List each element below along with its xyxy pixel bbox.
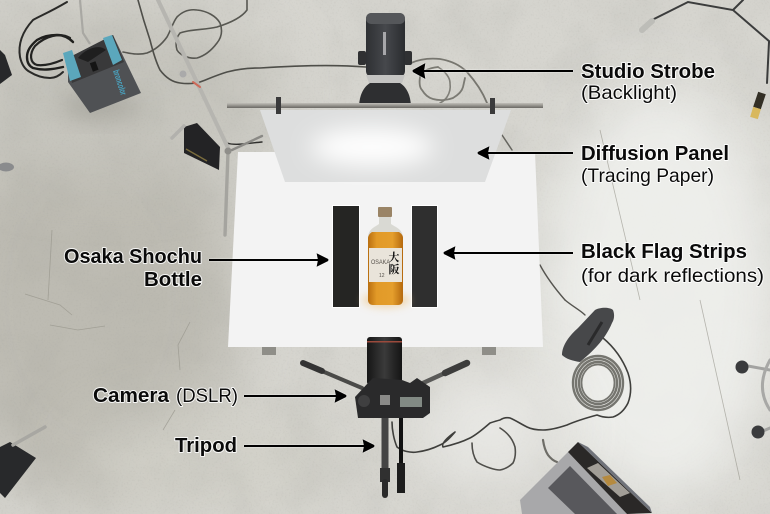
arrow: to tripod <box>244 441 374 451</box>
label: black flag strips: Black Flag Strips <box>581 241 747 263</box>
label: tripod: Tripod <box>175 435 237 457</box>
shochu bottle: OSAKA <box>371 260 390 266</box>
label: tripod <box>175 435 374 457</box>
label: diffusion panel <box>478 143 729 187</box>
label: camera: (DSLR) <box>176 385 238 407</box>
diffusion panel <box>260 110 511 182</box>
label: diffusion panel: (Tracing Paper) <box>581 165 714 187</box>
white table surface <box>228 152 543 355</box>
sandbag <box>172 123 220 170</box>
arrow: to black flag strips <box>444 248 573 258</box>
label: osaka shochu bottle: Osaka Shochu <box>64 246 202 268</box>
label: camera: Camera <box>93 385 170 407</box>
DSLR camera <box>355 337 430 418</box>
support rail with clamps <box>227 97 543 114</box>
label: diffusion panel: Diffusion Panel <box>581 143 729 165</box>
label: osaka shochu bottle: Bottle <box>144 269 202 291</box>
label: black flag strips: (for dark reflections) <box>581 265 764 287</box>
power pack: generator: broncolor <box>111 69 129 97</box>
black flag strips <box>332 205 438 308</box>
label: studio strobe: (Backlight) <box>581 82 677 104</box>
chair base right <box>736 360 770 438</box>
label: osaka shochu bottle <box>64 246 328 291</box>
cables on floor <box>20 0 631 470</box>
shochu bottle: 大 <box>388 249 400 265</box>
arrow: to bottle <box>209 255 328 265</box>
shochu bottle: 阪 <box>388 261 400 277</box>
studio strobe light <box>358 13 412 108</box>
laptop <box>520 442 652 514</box>
label: black flag strips <box>444 241 764 287</box>
sandbag right <box>562 308 614 362</box>
coiled cable <box>573 356 623 410</box>
light stand <box>158 0 262 235</box>
arrow: to camera <box>244 391 346 401</box>
arrow: to diffusion panel <box>478 148 573 158</box>
label: camera <box>93 385 346 407</box>
label: studio strobe: Studio Strobe <box>581 61 715 83</box>
arrow: to studio strobe <box>413 65 573 77</box>
tripod stand top right <box>642 0 770 118</box>
shochu bottle: 12 <box>379 273 385 279</box>
tripod <box>303 363 467 495</box>
flag stand bottom-left <box>0 427 45 498</box>
shochu bottle <box>362 207 410 308</box>
power pack: generator <box>58 0 142 120</box>
edge gear left <box>0 50 14 172</box>
label: studio strobe <box>413 61 715 104</box>
